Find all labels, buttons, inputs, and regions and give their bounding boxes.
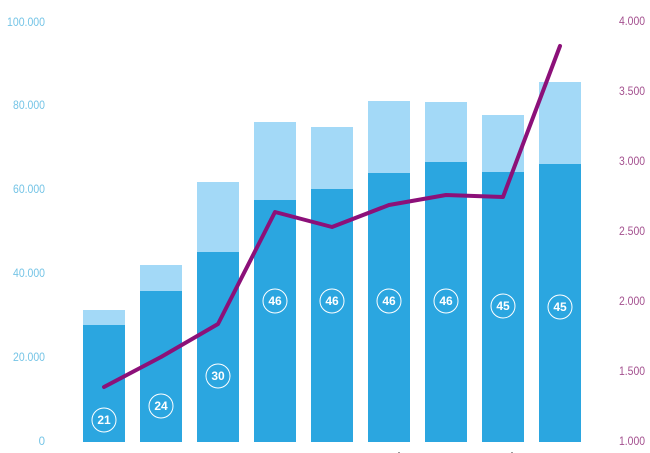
circled bar values: 46 (439, 294, 453, 308)
right axis labels: 4.000 (619, 16, 645, 28)
purple line series (104, 46, 560, 387)
circled bar values (92, 289, 572, 432)
right axis labels (619, 16, 645, 448)
clipped marks at bottom edge (398, 452, 513, 453)
left axis labels: 20.000 (13, 352, 45, 364)
circled bar values: 46 (325, 294, 339, 308)
left axis labels: 100.000 (7, 17, 45, 29)
right axis labels: 3.000 (619, 156, 645, 168)
circled bar values: 46 (268, 294, 282, 308)
right axis labels: 2.500 (619, 226, 645, 238)
circled bar values: 21 (97, 413, 111, 427)
stacked bars (83, 82, 581, 442)
left axis labels: 80.000 (13, 100, 45, 112)
circled bar values: 30 (211, 369, 225, 383)
left axis labels: 40.000 (13, 268, 45, 280)
right axis labels: 2.000 (619, 296, 645, 308)
left axis labels (7, 17, 45, 448)
circled bar values: 45 (496, 299, 510, 313)
left axis labels: 0 (39, 436, 45, 448)
left axis labels: 60.000 (13, 184, 45, 196)
circled bar values: 24 (154, 399, 168, 413)
right axis labels: 1.500 (619, 366, 645, 378)
circled bar values: 46 (382, 294, 396, 308)
right axis labels: 3.500 (619, 86, 645, 98)
circled bar values: 45 (553, 300, 567, 314)
right axis labels: 1.000 (619, 436, 645, 448)
